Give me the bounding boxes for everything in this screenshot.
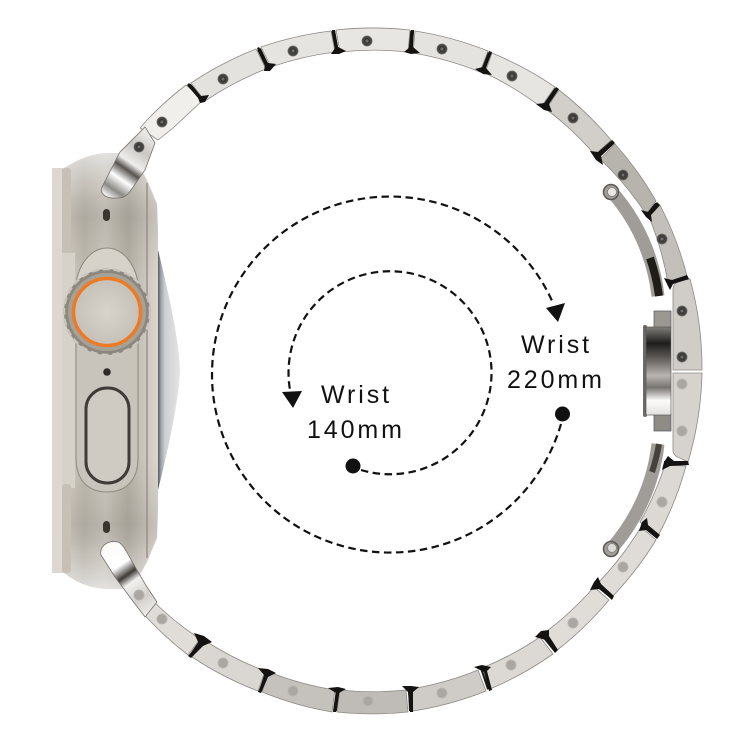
inner dashed circle <box>289 271 492 474</box>
case shading <box>52 153 158 589</box>
inner folding clasp arm: lower <box>604 444 659 556</box>
plate hole <box>103 368 111 376</box>
watch glass <box>158 250 180 490</box>
link 5 <box>413 31 488 72</box>
seam backing between links <box>189 31 686 711</box>
inner arc arrowhead <box>282 391 302 408</box>
case body <box>52 153 158 589</box>
digital crown <box>64 269 150 355</box>
link 4 <box>336 28 410 52</box>
crown guard <box>76 248 138 282</box>
speaker slot lower <box>103 521 110 533</box>
lower polished lug <box>101 542 157 617</box>
clasp link lower <box>673 373 702 462</box>
action button <box>86 388 129 483</box>
link 14 <box>543 587 609 651</box>
label: wrist 140mm: 140mm <box>307 416 405 444</box>
right bezel edge <box>146 183 148 558</box>
side button plate <box>76 340 138 492</box>
link 2 <box>191 49 266 101</box>
seam shadows on link inner edges <box>187 30 689 712</box>
link 17 <box>337 690 408 714</box>
link 15 <box>482 637 553 689</box>
watch case side view <box>52 127 180 617</box>
link 7 <box>546 90 611 155</box>
link 20 <box>140 600 200 655</box>
label: wrist 220mm: Wrist <box>521 331 592 359</box>
clasp link upper <box>673 279 702 370</box>
link 6 <box>485 53 555 107</box>
inner folding clasp arm: upper <box>604 184 659 296</box>
outer wrist size arc <box>212 197 570 553</box>
link 9 <box>649 205 687 283</box>
link 3 <box>261 31 335 67</box>
inner wrist size arc <box>282 271 492 474</box>
outer arc start dot <box>555 406 570 422</box>
label: wrist 220mm: 220mm <box>507 366 605 394</box>
metal link bracelet <box>140 28 702 714</box>
link 19 <box>192 640 265 691</box>
outer arc arrowhead <box>546 303 565 322</box>
link 1 <box>140 85 203 140</box>
link 16 <box>411 670 486 711</box>
flat grey rivet pins <box>157 379 687 706</box>
inner arc start dot <box>346 458 360 474</box>
dark rivet pins <box>156 36 688 362</box>
label: wrist 140mm: Wrist <box>321 381 392 409</box>
link 18 <box>262 672 335 712</box>
outer dashed circle <box>212 197 561 553</box>
link 13 <box>597 527 656 597</box>
left edge strip <box>52 168 75 573</box>
link 8 <box>600 144 656 214</box>
clasp body <box>643 311 671 431</box>
link 12 <box>640 465 686 536</box>
speaker slot upper <box>103 209 110 221</box>
upper polished lug <box>101 127 155 198</box>
